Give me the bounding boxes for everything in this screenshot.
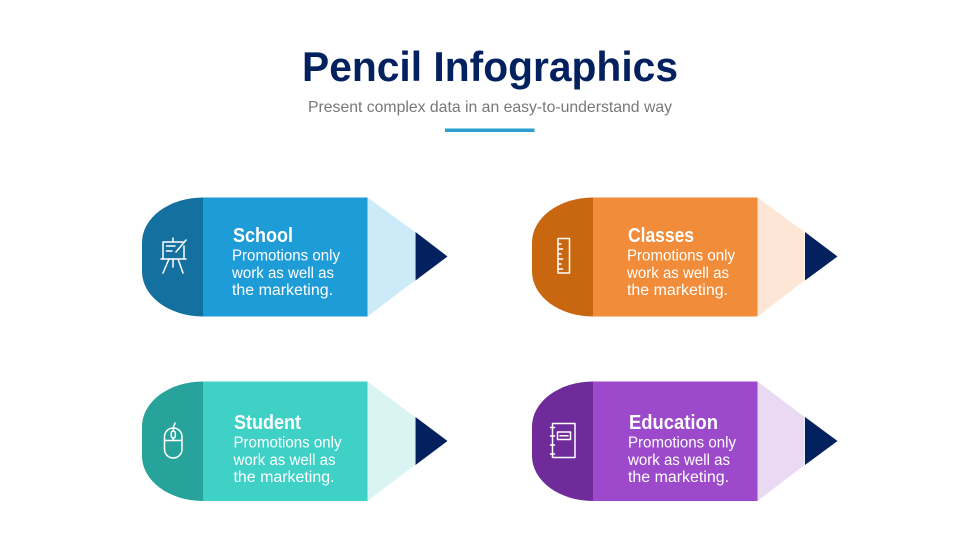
pencil body [593, 198, 758, 316]
panel: Education pencil [532, 382, 838, 501]
heading: Classes: Classes [628, 225, 694, 247]
pencil wood cone [368, 198, 415, 316]
pencil eraser end [532, 198, 593, 316]
text block: Classes description: Promotions only [627, 248, 735, 264]
text block: Classes description: work as well as [626, 265, 729, 282]
pencil lead tip [805, 417, 838, 465]
panel: Classes pencil [532, 198, 838, 316]
pencil wood cone [758, 198, 804, 316]
text block: Student description: the marketing. [234, 469, 334, 486]
icon: notebook [550, 424, 575, 458]
text block: Student description: Promotions only [234, 434, 342, 452]
icon: ruler [558, 238, 570, 273]
pencil lead tip [416, 232, 448, 280]
text block: Education description: the marketing. [628, 469, 729, 486]
text block: School description: the marketing. [232, 282, 333, 299]
text block: School description: Promotions only [232, 248, 340, 264]
icon: presentation board [161, 238, 186, 273]
pencil eraser end [142, 382, 203, 501]
pencil body [203, 198, 368, 316]
pencil body [593, 382, 758, 501]
text block: Classes description [626, 248, 735, 299]
text block: School description [231, 248, 340, 299]
text block: School description: work as well as [231, 265, 334, 282]
text block: Student description: work as well as [233, 452, 336, 469]
text block: Classes description: the marketing. [627, 282, 728, 299]
pencil body [203, 382, 368, 501]
pencil lead tip [805, 232, 838, 280]
title underline accent [445, 128, 534, 132]
icon: computer mouse [164, 423, 182, 458]
heading: Education: Education [629, 412, 718, 434]
heading: School: School [233, 225, 293, 247]
pencil wood cone [368, 382, 415, 501]
text block: Education description: work as well as [627, 452, 730, 469]
title: Pencil Infographics [302, 43, 678, 90]
text block: Education description: Promotions only [628, 434, 736, 452]
pencil lead tip [416, 417, 448, 465]
text block: Student description [233, 434, 342, 486]
subtitle: Present complex data in an easy-to-understand way [308, 99, 672, 116]
pencil eraser end [532, 382, 593, 501]
panel: Student pencil [142, 382, 448, 501]
pencil wood cone [758, 382, 804, 501]
pencil eraser end [142, 198, 203, 316]
heading: Student: Student [234, 412, 301, 434]
text block: Education description [627, 434, 736, 486]
panel: School pencil [142, 198, 448, 316]
